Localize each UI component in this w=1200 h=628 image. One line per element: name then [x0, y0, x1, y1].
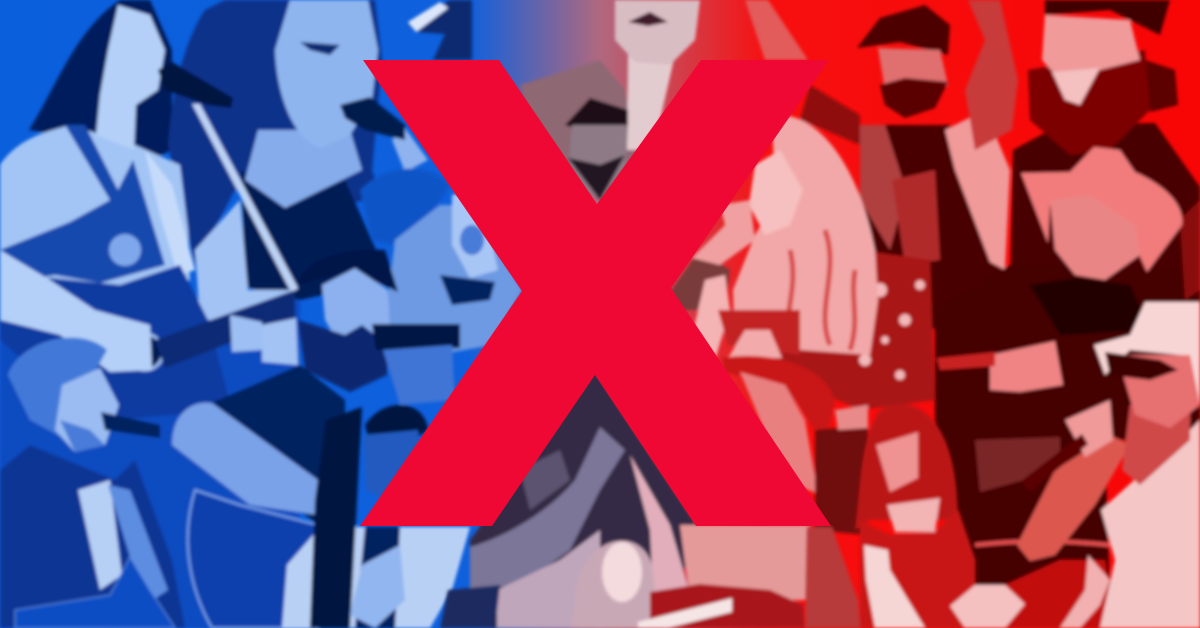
- singer one: microphone: [158, 62, 233, 108]
- man in cap: hat: [857, 5, 950, 55]
- raised arm with tattoos: [965, 0, 1018, 150]
- blonde singer open mouth: [460, 225, 484, 255]
- mic grip: [408, 2, 448, 32]
- left guitarist microphone: [101, 412, 160, 438]
- raised hand and mic at top: [408, 0, 472, 60]
- left guitarist shirt: [78, 480, 122, 590]
- left arm with tattoos: [800, 85, 860, 145]
- lower man face and beard: [568, 125, 628, 200]
- singer one: long dark hair: [29, 0, 172, 165]
- lower man cap: [565, 98, 628, 130]
- dancer raised arm: [864, 545, 925, 628]
- tank performer: tank top: [1100, 420, 1200, 628]
- singer two: face: [275, 0, 378, 148]
- mid blue area under blonde singer: [383, 345, 455, 405]
- man in cap: vest and body: [860, 125, 1005, 330]
- red-haired singer: dress: [860, 510, 975, 628]
- bearded singer arm: [172, 403, 318, 515]
- pale arm near red-haired singer: [835, 405, 868, 430]
- tank performer: face: [1117, 355, 1200, 428]
- pale lavender background: [497, 530, 600, 628]
- singer one: halter top: [0, 125, 165, 285]
- left guitarist guitar: [15, 557, 175, 628]
- blonde singer: hair: [733, 115, 878, 355]
- big man: jacket: [1010, 123, 1200, 300]
- singer two: arm and shoulder: [195, 200, 295, 320]
- dark center shirt: [355, 527, 400, 628]
- blue side: performers: [0, 0, 522, 628]
- big man: open mouth: [1052, 68, 1100, 105]
- center panel: morgan at top: [440, 0, 815, 628]
- lower left backdrop: [0, 300, 300, 628]
- singer two: neck and chest: [245, 130, 362, 208]
- lower pale sleeve: [630, 455, 700, 628]
- guitar fretboard graphic: [975, 437, 1060, 492]
- man in cap: light vest side: [945, 110, 1010, 270]
- large acoustic guitar body: [188, 490, 318, 628]
- blue cowboy hat: [360, 169, 450, 245]
- dreadlock singer hair top: [365, 405, 428, 445]
- small white hat: [950, 585, 1025, 628]
- bearded singer face: [322, 268, 390, 345]
- hand holding microphone: [350, 545, 405, 628]
- singer two: hand: [392, 128, 428, 172]
- left guitarist face: [55, 368, 119, 452]
- singer two: hair: [168, 0, 382, 265]
- blonde singer face: [452, 190, 498, 278]
- fringed white jacket: [282, 527, 470, 628]
- man in cap: patterned jacket: [860, 125, 906, 250]
- singer one: forearm: [0, 250, 152, 372]
- blonde singer hair: [385, 205, 522, 360]
- dreadlock hair: [310, 407, 362, 628]
- bottom center dark crowd: [470, 370, 700, 628]
- singer one: dress medallion: [109, 234, 141, 266]
- singer one: guitar strap: [145, 150, 195, 275]
- big man: hair at the back: [1145, 60, 1178, 112]
- left guitarist beard: [60, 420, 105, 452]
- center dark backing: [815, 425, 868, 535]
- bearded singer shirt: [180, 365, 345, 527]
- guitar neck: [638, 598, 732, 628]
- arm down: [690, 275, 730, 360]
- blonde singer: face: [749, 150, 803, 235]
- cowboy dark shirt: [1030, 278, 1150, 335]
- cowboy hat: [1021, 147, 1182, 272]
- cowboy face: [1050, 195, 1140, 280]
- hat woman: red brim: [722, 356, 835, 447]
- lower right dark body: [935, 265, 1200, 600]
- singer two: dark shirt: [241, 170, 385, 300]
- big man: cap: [1045, 0, 1170, 35]
- acoustic guitar: [0, 265, 232, 420]
- tank performer: sunglasses: [1105, 352, 1178, 380]
- forearm to hand: [937, 352, 995, 370]
- red guitar at bottom: [650, 584, 805, 628]
- tank performer: microphone: [1021, 434, 1088, 492]
- hair streaks: [787, 230, 855, 350]
- man in cap: t-shirt graphic: [892, 170, 940, 265]
- raised arm: [470, 427, 625, 590]
- bearded singer cap: [298, 250, 398, 292]
- red side: performers: [670, 0, 1200, 628]
- guitar outline: [975, 541, 1110, 545]
- vocal microphone: [372, 324, 460, 350]
- top man moustache: [628, 12, 668, 26]
- singer two: eye: [300, 42, 340, 55]
- embroidered jacket pale: [680, 525, 815, 600]
- lower man beard: [568, 155, 625, 200]
- bearded singer beard: [298, 320, 388, 392]
- blonde performer face: [602, 542, 642, 602]
- singer one: shoulders and torso: [0, 125, 190, 300]
- singer two: microphone: [340, 97, 405, 140]
- red X mark: [360, 60, 831, 526]
- left guitarist jacket: [0, 445, 185, 628]
- tank performer: microphone hand: [1065, 400, 1113, 457]
- dark behind arm: [670, 250, 730, 310]
- guitar sound hole: [127, 334, 163, 370]
- embroidered fringe sleeve: [805, 527, 860, 628]
- left guitarist hair: [8, 338, 107, 437]
- hat woman: crown: [728, 330, 782, 358]
- lower dress left: [718, 310, 800, 355]
- crowd specks: [520, 450, 570, 510]
- big man: beard: [1028, 50, 1150, 155]
- guitar neck and hand: [155, 290, 295, 368]
- raised arm far left: [745, 0, 808, 60]
- small dancer hand: [1060, 555, 1110, 628]
- performer hand on fret: [230, 315, 262, 352]
- blonde singer: dress: [770, 250, 935, 410]
- floor backdrop: [975, 560, 1115, 628]
- mic stand: [192, 104, 298, 294]
- blonde performer hair: [572, 541, 660, 628]
- singer one: face and neck: [96, 5, 165, 150]
- top man shirt: [520, 60, 640, 170]
- left guitarist strap: [108, 485, 168, 605]
- tank performer: hat: [1094, 302, 1200, 405]
- tank performer: arm: [1017, 435, 1130, 561]
- red-haired singer: face: [876, 432, 918, 492]
- right jacket highlight: [1180, 200, 1200, 300]
- top man neck and chest: [627, 55, 675, 150]
- dress sparkles: [859, 280, 925, 380]
- man in cap: beard: [880, 78, 948, 118]
- man in cap: face: [878, 48, 948, 95]
- singer hand and microphone: [692, 200, 755, 265]
- top man hair and face: [615, 0, 700, 65]
- blonde singer dark neck: [440, 275, 495, 305]
- dreadlock singer face: [364, 430, 420, 500]
- red-haired singer: chest: [887, 498, 940, 532]
- big man: face: [1042, 15, 1140, 80]
- tank performer: neck: [1122, 400, 1190, 485]
- hat woman: face and braid: [740, 372, 818, 494]
- red-haired singer: hair: [855, 404, 958, 530]
- pale shoulder by beard: [262, 318, 298, 365]
- hand on chest: [990, 341, 1063, 392]
- dark navy under fringe: [440, 585, 500, 628]
